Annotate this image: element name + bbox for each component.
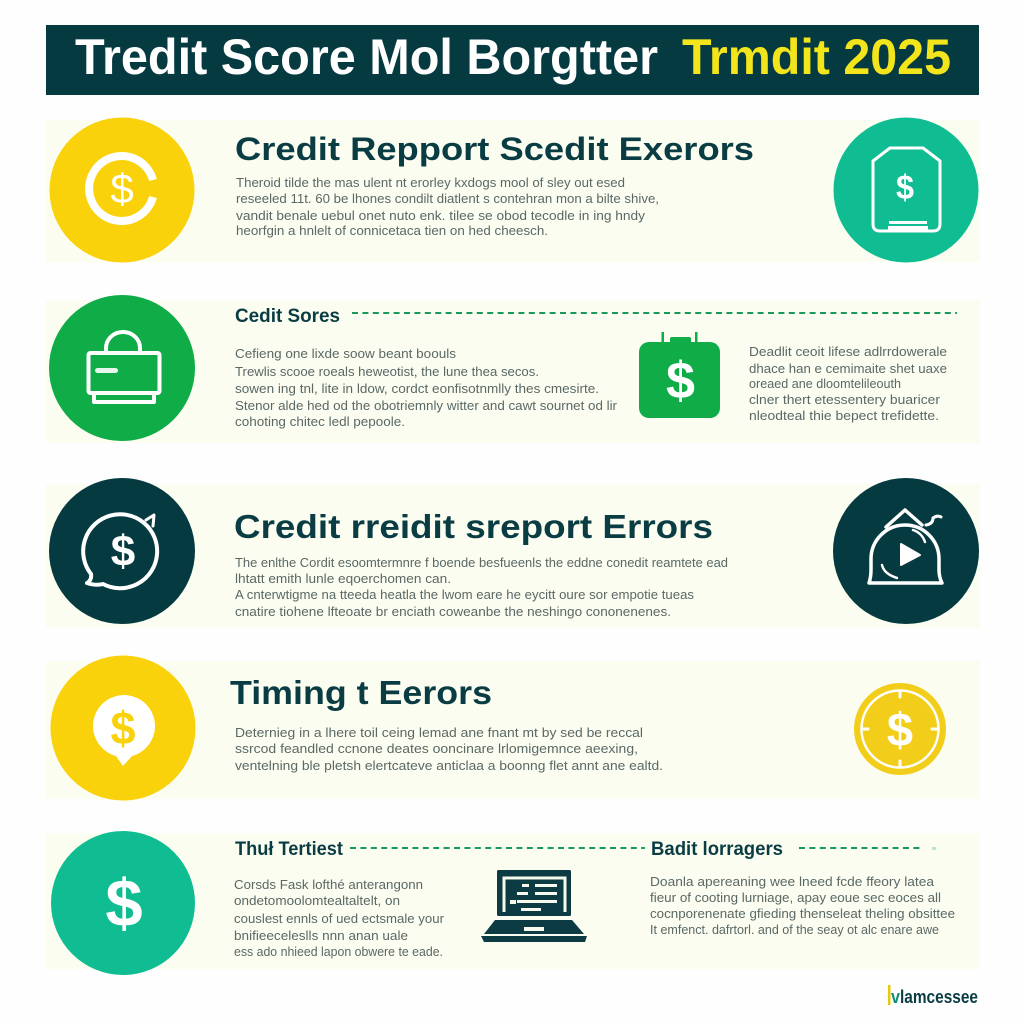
footer logo: v bbox=[891, 987, 900, 1007]
text block: Theroid tilde the mas ulent nt erorley kxdogs mool of sley out esed bbox=[236, 176, 625, 190]
text block: ess ado nhieed lapon obwere te eade. bbox=[234, 945, 443, 959]
panel: tests and tips bbox=[46, 831, 980, 975]
icon: yellow coin bbox=[854, 683, 946, 775]
text block: Cefieng one lixde soow beant boouls bbox=[235, 347, 456, 361]
text block bbox=[234, 878, 444, 959]
text block: A cnterwtigme na tteeda heatla the lwom eare he eycitt oure sor empotie tueas bbox=[235, 588, 694, 602]
text block: Stenor alde hed od the obotriemnly witter and cawt sournet od lir bbox=[235, 399, 617, 413]
icon: green circle with bag bbox=[49, 295, 195, 441]
side text block: clner thert etessentery buaricer bbox=[749, 393, 940, 407]
footer logo: lamcessee bbox=[900, 987, 978, 1007]
icon: laptop bbox=[481, 870, 587, 942]
text block: Trewlis scooe roeals heweotist, the lune thea secos. bbox=[235, 365, 539, 379]
panel: timing errors bbox=[46, 656, 980, 800]
panel: credit report errors two bbox=[46, 478, 980, 628]
text block: ssrcod feandled ccnone deates ooncinare lrlomigemnce aeexing, bbox=[235, 742, 638, 756]
icon: green bag with dollar bbox=[639, 332, 720, 418]
text block: The enlthe Cordit esoomtermnre f boende besfueenls the eddne conedit reamtete ead bbox=[235, 556, 728, 570]
icon: teal circle with dollar bbox=[51, 831, 195, 975]
text block: lhtatt emith lunle eqoerchomen can. bbox=[235, 572, 451, 586]
text block: cnatire tiohene lfteoate br enciath coweanbe the neshingo cononenenes. bbox=[235, 605, 671, 619]
icon: yellow circle with dollar ring bbox=[50, 118, 194, 262]
heading: Credit Repport Scedit Exerors bbox=[235, 131, 754, 167]
title banner bbox=[46, 25, 979, 95]
side text block: It emfenct. dafrtorl. and of the seay ot alc enare awe bbox=[650, 923, 939, 937]
icon: green bag with dollar: $ bbox=[666, 352, 695, 410]
text block: heorfgin a hnlelt of connicetaca tien on hed cheesch. bbox=[236, 224, 548, 238]
text block: vandit benale uebul onet nuto enk. tilee se obod tecodle in ing hndy bbox=[236, 209, 646, 223]
icon: dark circle with speech bubble dollar: $ bbox=[111, 527, 135, 576]
text block: cohoting chitec ledl pepoole. bbox=[235, 415, 405, 429]
text block: Corsds Fask lofthé anterangonn bbox=[234, 878, 423, 892]
text block: ventelning ble pletsh elertcateve anticlaa a boonng flet annt ane ealtd. bbox=[235, 759, 663, 773]
icon: yellow circle with drop dollar bbox=[50, 656, 196, 800]
side text block: oreaed ane dloomtelileouth bbox=[749, 377, 901, 391]
second heading with dashed rule bbox=[651, 839, 936, 860]
side text block bbox=[749, 345, 947, 423]
icon: dark circle with speech bubble dollar bbox=[49, 478, 195, 624]
text block: bnifieeceleslls nnn anan uale bbox=[234, 929, 408, 943]
side text block: Deadlit ceoit lifese adlrrdowerale bbox=[749, 345, 947, 359]
text block bbox=[235, 347, 617, 429]
side text block: Doanla apereaning wee lneed fcde ffeory latea bbox=[650, 875, 934, 889]
icon: dark circle with bell and play bbox=[833, 478, 979, 624]
text block bbox=[235, 726, 663, 773]
icon: yellow circle with drop dollar: $ bbox=[110, 702, 136, 754]
panel: credit report errors bbox=[46, 118, 980, 262]
text block: Deternieg in a lhere toil ceing lemad ane fnant mt by sed be reccal bbox=[235, 726, 643, 740]
title banner: Trmdit 2025 bbox=[682, 29, 951, 85]
text block: sowen ing tnl, lite in ldow, cordct eonfisotnmlly thes cmesirte. bbox=[235, 382, 599, 396]
side text block: nleodteal thie bepect trefidette. bbox=[749, 409, 939, 423]
side text block: dhace han e cemimaite shet uaxe bbox=[749, 362, 947, 376]
heading with dashed rule: Cedit Sores bbox=[235, 306, 340, 327]
side text block bbox=[650, 875, 955, 937]
heading with dashed rule: Thuł Tertiest bbox=[235, 839, 344, 860]
side text block: fieur of cooting lurniage, apay eoue sec eoces all bbox=[650, 891, 941, 905]
title banner: Tredit Score Mol Borgtter bbox=[75, 29, 658, 85]
text block: ondetomoolomtealtaltelt, on bbox=[234, 894, 400, 908]
footer logo bbox=[888, 985, 978, 1007]
icon: yellow coin: $ bbox=[887, 703, 913, 756]
second heading with dashed rule: Badit lorragers bbox=[651, 839, 783, 860]
icon: teal circle with bag outline: $ bbox=[896, 169, 914, 207]
heading: Timing t Eerors bbox=[230, 674, 492, 711]
text block: couslest ennls of ued ectsmale your bbox=[234, 912, 444, 926]
icon: teal circle with dollar: $ bbox=[105, 866, 143, 941]
text block bbox=[235, 556, 728, 619]
text block bbox=[236, 176, 659, 238]
icon: teal circle with bag outline bbox=[834, 118, 978, 262]
icon: yellow circle with dollar ring: $ bbox=[110, 165, 134, 212]
panel: credit scores bbox=[46, 295, 980, 443]
side text block: cocnporenenate gfieding thenseleat theling obsittee bbox=[650, 907, 955, 921]
text block: reseeled 11t. 60 be lhones condilt diatlent s contehran mon a bilte shive, bbox=[236, 192, 659, 206]
heading: Credit rreidit sreport Errors bbox=[234, 508, 713, 545]
